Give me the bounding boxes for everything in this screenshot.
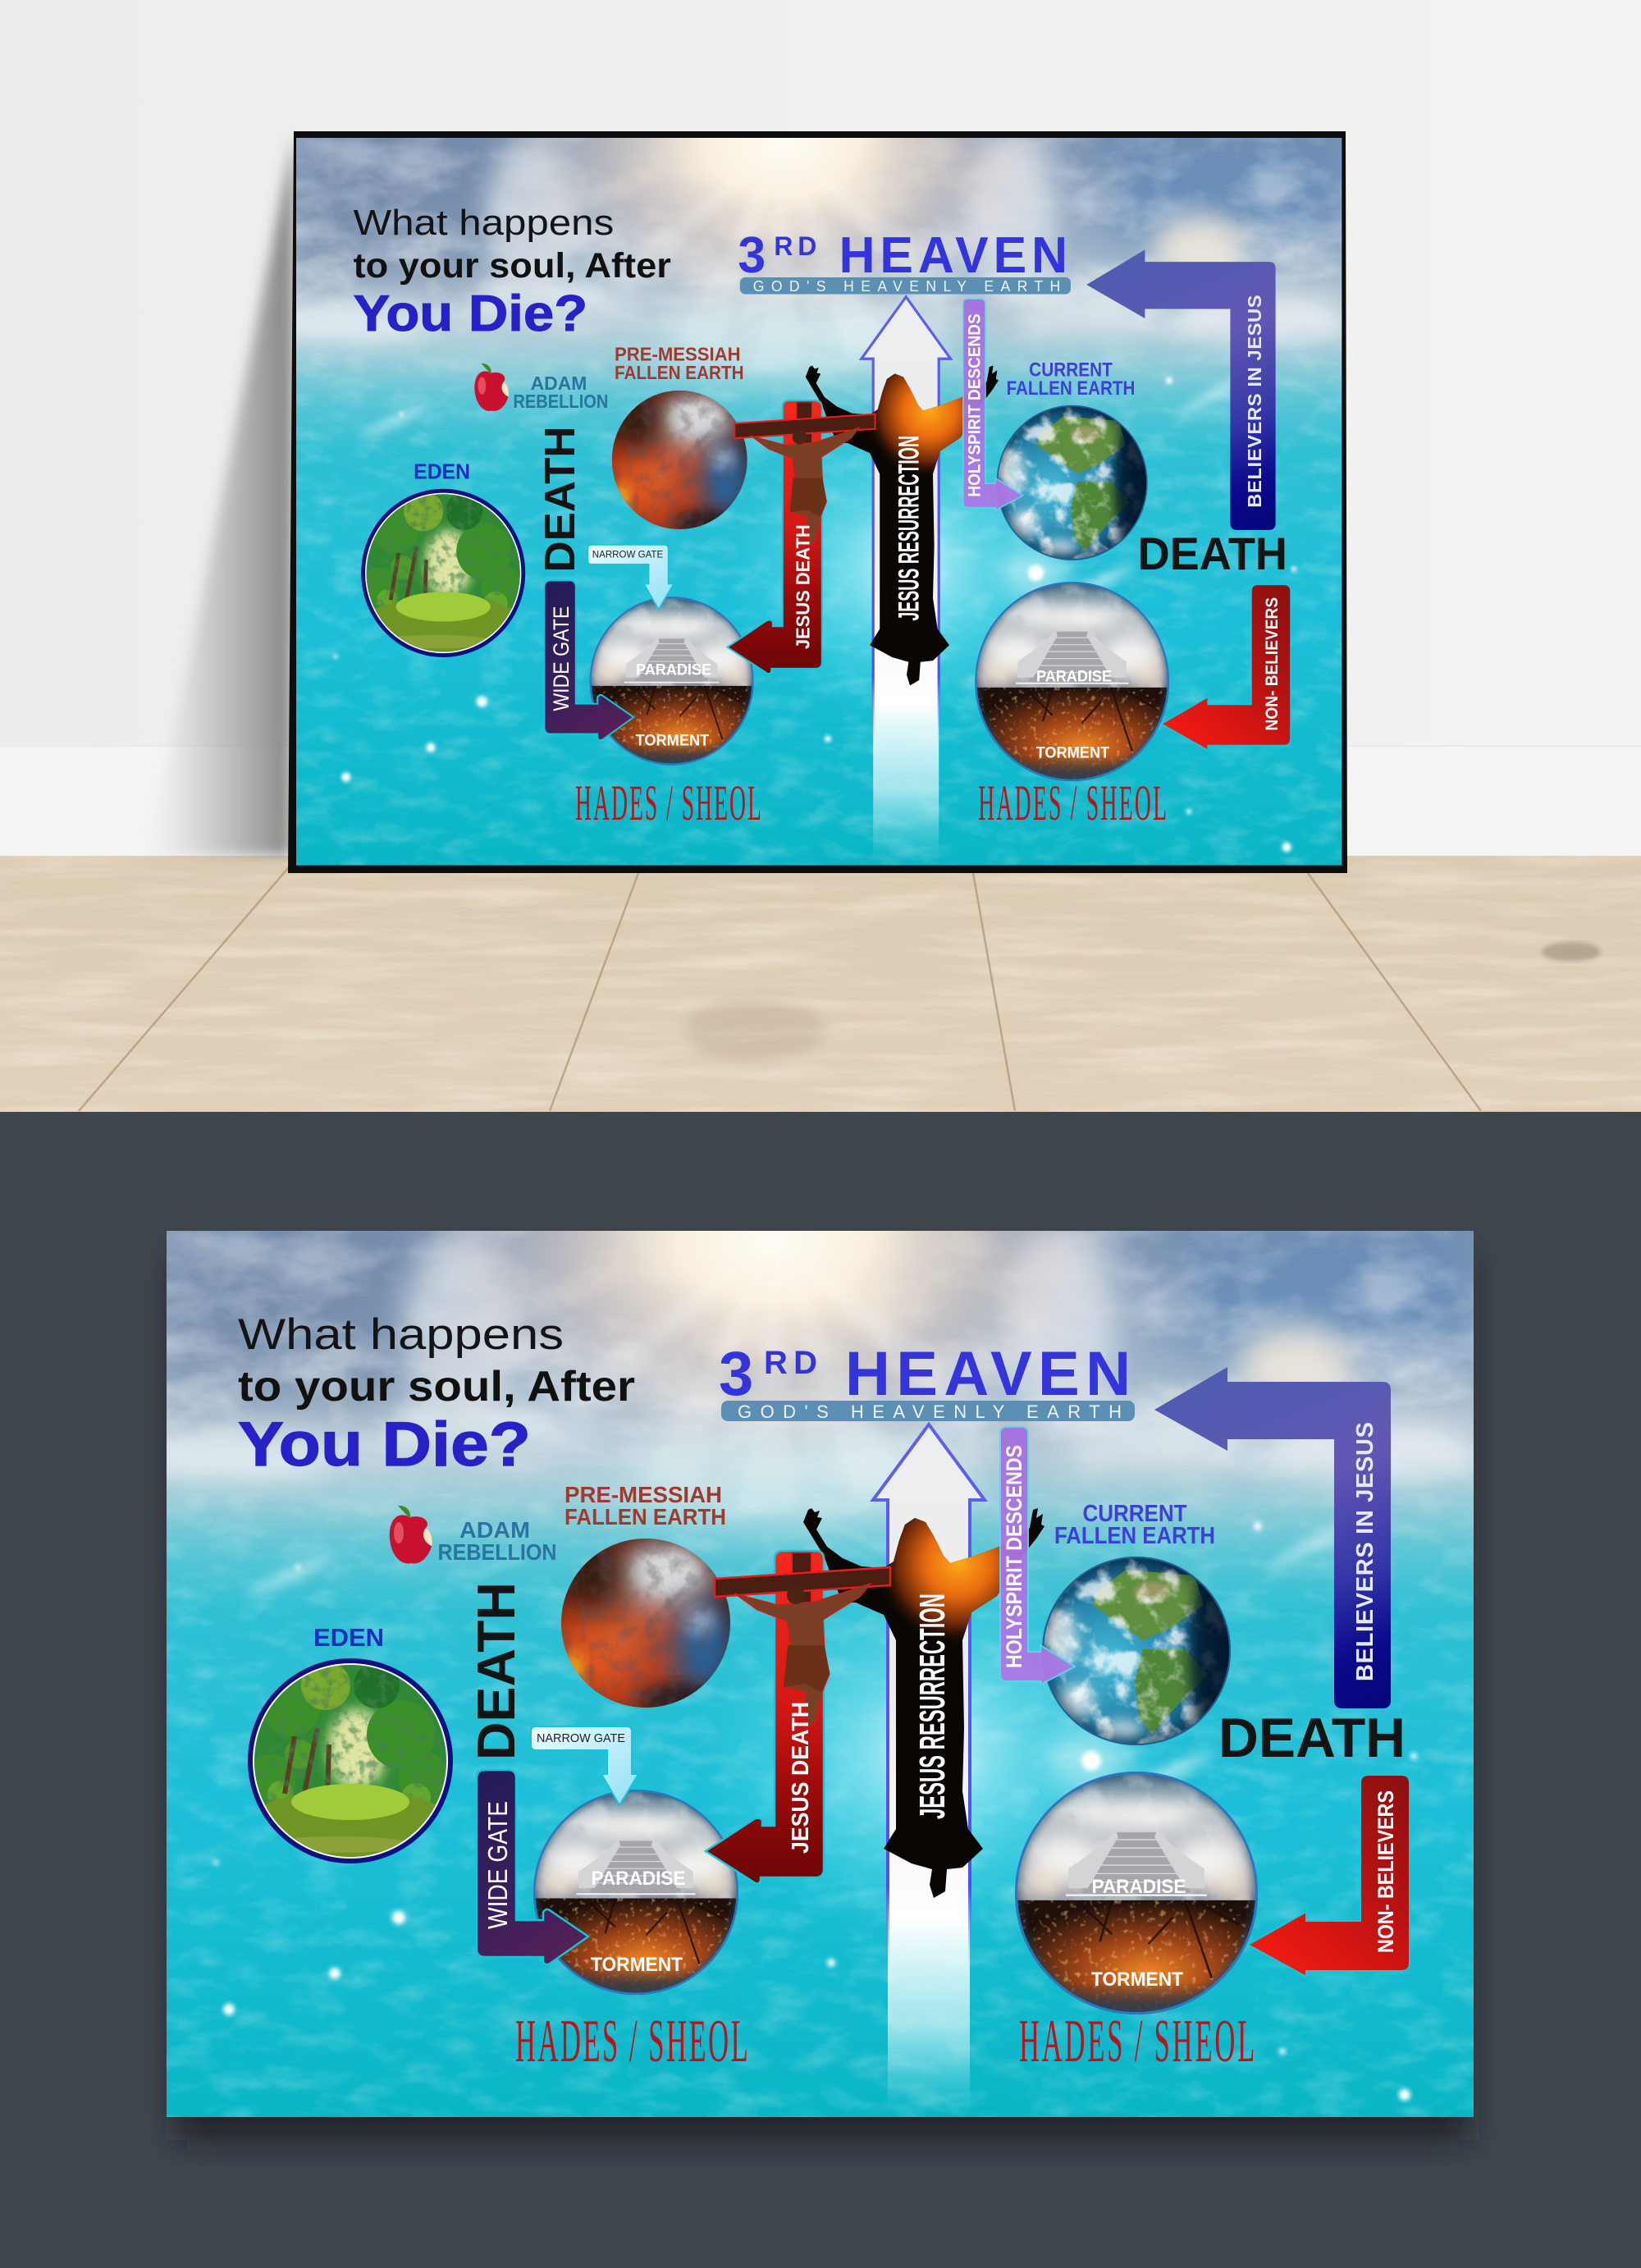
narrow gate arrow: NARROW GATE [537,1731,625,1745]
wood floor [0,856,1641,1112]
label: adam rebellion: REBELLION [513,391,608,412]
label: adam rebellion [438,1517,556,1565]
heading: 3rd heaven: HEAVEN [845,1339,1131,1409]
label: pre-messiah fallen earth [615,343,744,383]
hades sheol right: HADES / SHEOL [978,776,1167,831]
jesus death arrow [706,1551,890,1884]
jesus silhouette [806,360,1005,685]
non-believers arrow: NON- BELIEVERS [1261,597,1282,730]
believers in jesus arrow [1154,1367,1391,1708]
globe: current earth [997,405,1154,560]
labels: left hades: PARADISE [636,661,711,679]
label: pre-messiah fallen earth: PRE-MESSIAH [615,343,741,365]
hades sheol left: HADES / SHEOL [575,776,761,831]
label: adam rebellion [513,373,608,412]
title: You Die? [354,285,587,342]
black frame [288,131,1347,873]
death label left: DEATH [537,426,584,573]
hades sheol right: HADES / SHEOL [1019,2006,1255,2075]
jesus death arrow: JESUS DEATH [793,524,814,649]
circle: eden scene [354,489,532,664]
globe: current earth [1042,1557,1239,1745]
heading: 3rd heaven: HEAVEN [839,226,1067,284]
label: eden: EDEN [313,1623,384,1652]
holyspirit descends arrow: HOLYSPIRIT DESCENDS [1002,1445,1026,1668]
label: pre-messiah fallen earth: FALLEN EARTH [615,362,744,383]
wide gate arrow: WIDE GATE [482,1801,513,1929]
jesus death arrow [728,400,875,674]
baseboard [0,745,1641,857]
labels: left hades [591,1868,686,1976]
lower dark panel [0,1112,1641,2268]
death label left: DEATH [466,1582,526,1760]
title [354,203,671,342]
holyspirit descends arrow [1000,1427,1075,1685]
icon: apple [390,1506,432,1563]
label: current fallen earth: FALLEN EARTH [1007,377,1135,399]
non-believers arrow: NON- BELIEVERS [1374,1790,1398,1953]
label: current fallen earth: CURRENT [1029,359,1113,381]
jesus resurrection label: JESUS RESURRECTION [893,436,925,621]
narrow gate arrow: NARROW GATE [592,548,663,560]
believers in jesus arrow [1086,249,1276,530]
labels: left hades: TORMENT [636,731,709,750]
jesus death arrow: JESUS DEATH [788,1702,814,1854]
heading: 3rd heaven [719,1339,1131,1409]
non-believers arrow [1161,584,1291,750]
labels: right hades [1091,1876,1186,1991]
label: adam rebellion: ADAM [459,1517,530,1543]
banner: god's heavenly earth: GOD'S HEAVENLY EARTH [738,1401,1122,1422]
label: adam rebellion: ADAM [531,373,587,394]
globe: pre-messiah earth [554,1538,734,1713]
white resurrection arrow [873,1424,985,2109]
non-believers arrow [1248,1775,1410,1977]
lower poster shadow [176,1255,1469,2140]
title: to your soul, After [238,1363,635,1411]
heading: 3rd heaven: RD [774,231,816,261]
label: adam rebellion: REBELLION [438,1539,556,1565]
label: pre-messiah fallen earth: PRE-MESSIAH [565,1482,722,1507]
labels: left hades [636,661,711,750]
death label right: DEATH [1218,1707,1406,1769]
believers in jesus arrow: BELIEVERS IN JESUS [1244,295,1265,508]
labels: right hades: PARADISE [1091,1876,1186,1898]
wide gate arrow: WIDE GATE [549,606,574,711]
title: What happens [238,1310,564,1359]
heading: 3rd heaven: RD [764,1345,817,1381]
poster shadow on wall [146,135,294,856]
framed poster mockup [288,131,1347,873]
heading: 3rd heaven: 3 [719,1339,753,1409]
labels: right hades: TORMENT [1091,1968,1183,1991]
globe: right hades [1015,1772,1258,2022]
death label right: DEATH [1138,528,1287,579]
labels: right hades: TORMENT [1036,743,1109,761]
title: What happens [354,203,614,243]
label: current fallen earth [1007,359,1135,399]
holyspirit descends arrow [963,299,1023,510]
hades sheol left: HADES / SHEOL [515,2006,748,2075]
labels: left hades: TORMENT [591,1954,683,1976]
globe: right hades [975,582,1169,787]
circle: eden scene [240,1658,461,1872]
heading: 3rd heaven: 3 [738,226,766,284]
background sky and water [296,138,1342,866]
heading: 3rd heaven [738,226,1067,284]
title: to your soul, After [354,245,671,285]
white resurrection arrow [862,297,951,858]
believers in jesus arrow: BELIEVERS IN JESUS [1352,1422,1378,1681]
flat poster [167,1231,1474,2117]
labels: right hades: PARADISE [1036,667,1112,686]
label: eden: EDEN [414,460,470,484]
wide gate arrow [544,580,633,740]
jesus resurrection label: JESUS RESURRECTION [912,1594,953,1819]
background sky and water [167,1231,1474,2117]
globe: pre-messiah earth [606,390,751,534]
narrow gate arrow [531,1726,638,1805]
label: current fallen earth: CURRENT [1083,1501,1187,1527]
label: pre-messiah fallen earth: FALLEN EARTH [565,1504,726,1530]
jesus silhouette [803,1502,1053,1898]
wall [0,0,1641,857]
wide gate arrow [477,1770,588,1964]
holyspirit descends arrow: HOLYSPIRIT DESCENDS [964,313,985,497]
labels: right hades [1036,667,1112,761]
poster artwork [296,138,1342,866]
narrow gate arrow [587,545,674,610]
label: current fallen earth: FALLEN EARTH [1054,1523,1215,1549]
globe: left hades [590,597,754,770]
banner: god's heavenly earth: GOD'S HEAVENLY EARTH [753,278,1060,295]
label: current fallen earth [1054,1501,1215,1549]
title: You Die? [238,1410,531,1479]
globe: left hades [533,1790,738,2001]
label: pre-messiah fallen earth [565,1482,726,1530]
title [238,1310,635,1479]
labels: left hades: PARADISE [591,1868,686,1890]
icon: apple [474,364,509,411]
